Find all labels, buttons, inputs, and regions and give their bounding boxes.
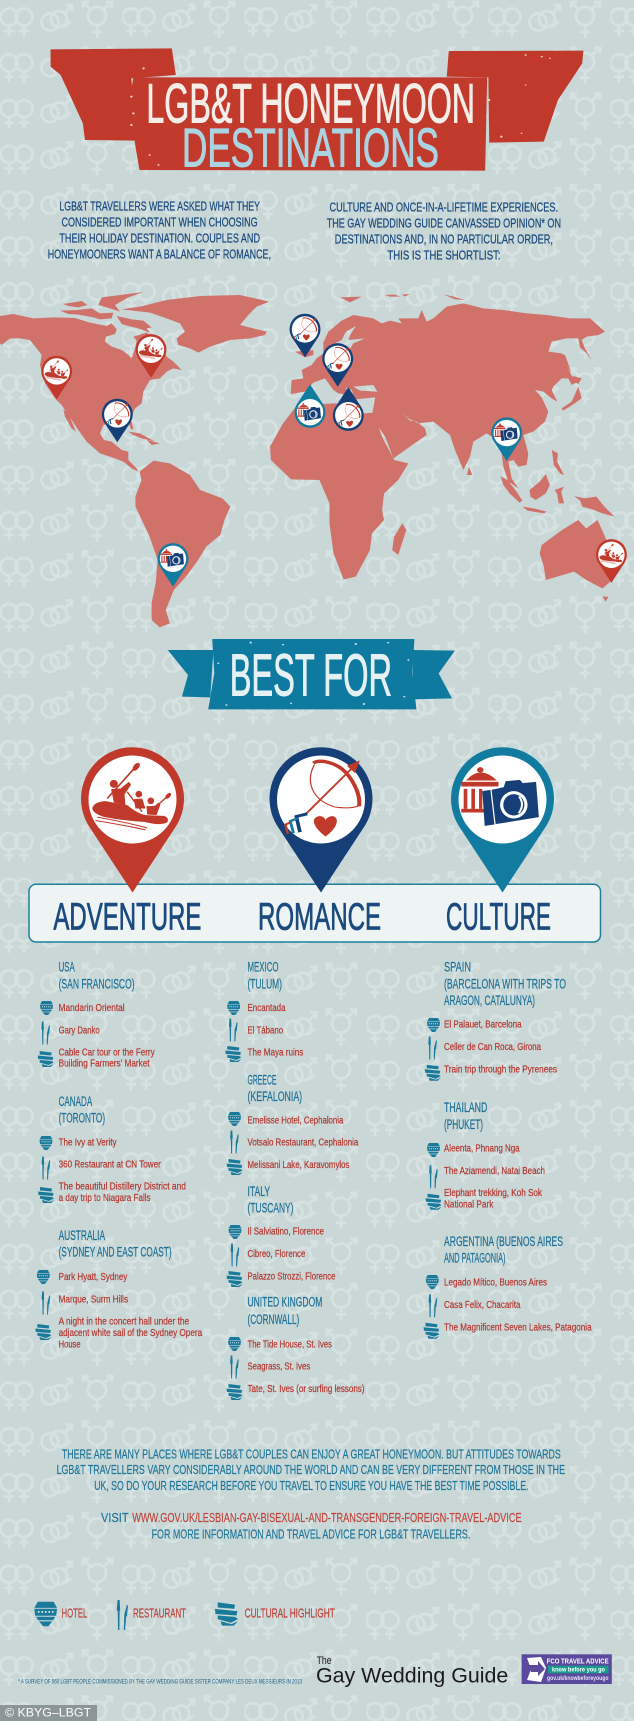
map pin: Sydney — [596, 539, 627, 583]
logo: the gay wedding guide: The — [317, 1655, 332, 1667]
visit link text: VISIT — [101, 1510, 129, 1525]
romance column: Italy: Palazzo Strozzi, Florence — [248, 1271, 336, 1282]
adventure column: Canada: a day trip to Niagara Falls — [59, 1193, 151, 1204]
legend: restaurant: RESTAURANT — [133, 1606, 186, 1620]
romance column: United Kingdom: Seagrass, St. Ives — [248, 1362, 310, 1373]
adventure column: Canada: The Ivy at Verity — [59, 1138, 117, 1149]
logo: FCO travel advice: gov.uk/knowbeforeyougo — [547, 1676, 609, 1682]
culture column: Thailand: Elephant trekking, Koh Sok — [444, 1188, 543, 1199]
footnote: * A SURVEY OF 560 LGBT PEOPLE COMMISSIONED BY THE GAY WEDDING GUIDE SISTER COMPANY LES DEUX MESSIEURS IN 2013 — [18, 1678, 302, 1685]
culture column: Thailand: The Aziamendi, Natai Beach — [444, 1166, 545, 1177]
culture column: Argentina: Casa Felix, Chacarita — [444, 1300, 521, 1311]
map pin: Barcelona — [295, 384, 325, 428]
romance column: United Kingdom: Tate, St. Ives (or surfing lessons) — [248, 1384, 364, 1395]
map pin: San Francisco — [41, 356, 72, 399]
culture column: Argentina: AND PATAGONIA) — [444, 1251, 506, 1266]
logo: FCO travel advice — [522, 1654, 612, 1684]
adventure column: Australia — [35, 1228, 202, 1350]
map pin: Tulum — [102, 399, 133, 442]
romance column: Greece: Emelisse Hotel, Cephalonia — [248, 1115, 344, 1126]
intro text: right column: THIS IS THE SHORTLIST: — [387, 248, 501, 262]
romance column: Italy: Il Salviatino, Florence — [248, 1227, 324, 1238]
copyright watermark: © KBYG–LBGT — [5, 1708, 91, 1720]
romance column: United Kingdom: (CORNWALL) — [248, 1312, 299, 1327]
intro text: right column — [327, 201, 561, 262]
visit link text: FOR MORE INFORMATION AND TRAVEL ADVICE FOR LGB&T TRAVELLERS. — [152, 1526, 470, 1541]
legend: hotel — [34, 1602, 87, 1626]
intro text: left column: CONSIDERED IMPORTANT WHEN CHOOSING — [62, 216, 258, 230]
adventure column: Canada: CANADA — [59, 1094, 92, 1109]
logo: FCO travel advice: FCO TRAVEL ADVICE — [547, 1656, 609, 1665]
adventure column: USA: Building Farmers' Market — [59, 1059, 150, 1070]
intro text: right column: DESTINATIONS AND, IN NO PARTICULAR ORDER, — [335, 233, 553, 247]
adventure column: USA — [38, 960, 155, 1070]
romance column: Italy: Cibreo, Florence — [248, 1249, 306, 1260]
adventure column: Canada: The beautiful Distillery District and — [59, 1181, 186, 1192]
map pin: Cornwall — [290, 314, 320, 357]
large pin: culture — [451, 747, 554, 892]
romance column: Greece — [226, 1072, 359, 1175]
romance column: Mexico: (TULUM) — [248, 976, 282, 991]
culture column: Thailand: Aleenta, Phnang Nga — [444, 1144, 520, 1155]
culture column: Spain: SPAIN — [444, 960, 471, 975]
romance column: Mexico: MEXICO — [248, 960, 278, 975]
best for ribbon: BEST FOR — [230, 643, 392, 709]
adventure column: USA: Gary Danko — [59, 1025, 100, 1036]
large pin: adventure — [81, 747, 184, 892]
romance column: Italy — [226, 1184, 336, 1287]
romance column: Mexico: The Maya ruins — [248, 1047, 303, 1058]
intro text: right column: CULTURE AND ONCE-IN-A-LIFETIME EXPERIENCES. — [330, 201, 558, 215]
label: romance: ROMANCE — [258, 896, 381, 938]
title banner — [51, 48, 583, 179]
adventure column: USA: Mandarin Oriental — [59, 1003, 125, 1014]
map pin: Kefalonia — [333, 387, 364, 431]
map pin: Phuket — [491, 417, 522, 461]
logo: the gay wedding guide — [316, 1655, 508, 1688]
world map — [0, 292, 627, 627]
culture column: Spain — [425, 960, 566, 1081]
culture column: Argentina — [424, 1234, 592, 1339]
culture column: Thailand: THAILAND — [444, 1100, 487, 1115]
adventure column: Australia: Marque, Surm Hills — [59, 1294, 128, 1305]
adventure column: Australia: adjacent white sail of the Sydney Opera — [59, 1328, 202, 1339]
romance column: Greece: (KEFALONIA) — [248, 1089, 302, 1104]
romance column: Italy: ITALY — [248, 1184, 270, 1199]
romance column: United Kingdom: The Tide House, St. Ives — [248, 1339, 332, 1350]
adventure column: Australia: AUSTRALIA — [59, 1228, 105, 1243]
culture column: Spain: Celler de Can Roca, Girona — [444, 1042, 541, 1053]
culture column: Thailand — [426, 1100, 545, 1210]
legend: restaurant — [117, 1600, 186, 1630]
romance column: Greece: GREECE — [248, 1072, 276, 1087]
legend: cultural highlight — [215, 1602, 335, 1626]
large pin: romance — [270, 747, 372, 892]
intro text: left column — [48, 200, 271, 261]
best for ribbon — [168, 639, 455, 709]
map pin: Tuscany — [322, 343, 353, 387]
label: adventure: ADVENTURE — [53, 896, 201, 938]
culture column: Spain: ARAGON, CATALUNYA) — [444, 993, 535, 1008]
culture column: Spain: El Palauet, Barcelona — [444, 1020, 522, 1031]
map pin: Toronto — [136, 334, 166, 378]
romance column: Mexico: El Tábano — [248, 1025, 283, 1036]
adventure column: Australia: (SYDNEY AND EAST COAST) — [59, 1245, 172, 1260]
intro text: left column: LGB&T TRAVELLERS WERE ASKED WHAT THEY — [59, 200, 260, 214]
visit link text — [101, 1510, 522, 1541]
adventure column: USA: (SAN FRANCISCO) — [59, 976, 135, 991]
category label bar — [29, 884, 600, 942]
romance column: United Kingdom — [226, 1295, 364, 1400]
adventure column: Canada — [38, 1094, 186, 1204]
culture column: Thailand: (PHUKET) — [444, 1117, 483, 1132]
copyright watermark — [0, 1705, 97, 1721]
romance column: Mexico — [225, 960, 303, 1062]
romance column: Mexico: Encantada — [248, 1003, 286, 1014]
logo: the gay wedding guide: Gay Wedding Guide — [316, 1665, 508, 1688]
culture column: Spain: (BARCELONA WITH TRIPS TO — [444, 976, 566, 991]
culture column: Argentina: ARGENTINA (BUENOS AIRES — [444, 1234, 563, 1249]
adventure column: Australia: Park Hyatt, Sydney — [59, 1272, 127, 1283]
culture column: Argentina: Legado Mítico, Buenos Aires — [444, 1278, 547, 1289]
closing advice text — [57, 1446, 565, 1493]
legend — [34, 1600, 335, 1630]
adventure column: Australia: A night in the concert hall under the — [59, 1317, 190, 1328]
intro text: left column: THEIR HOLIDAY DESTINATION. COUPLES AND — [59, 232, 260, 246]
intro text: left column: HONEYMOONERS WANT A BALANCE OF ROMANCE, — [48, 247, 271, 261]
culture column: Spain: Train trip through the Pyrenees — [444, 1064, 557, 1075]
adventure column: USA: Cable Car tour or the Ferry — [59, 1047, 155, 1058]
map pin: Buenos Aires — [158, 543, 188, 587]
adventure column: USA: USA — [59, 960, 75, 975]
adventure column: Canada: 360 Restaurant at CN Tower — [59, 1159, 161, 1170]
romance column: Italy: (TUSCANY) — [248, 1201, 294, 1216]
legend: cultural highlight: CULTURAL HIGHLIGHT — [245, 1606, 335, 1620]
adventure column: Canada: (TORONTO) — [59, 1111, 105, 1126]
culture column: Thailand: National Park — [444, 1199, 494, 1210]
romance column: Greece: Votsalo Restaurant, Cephalonia — [248, 1138, 359, 1149]
label: culture: CULTURE — [446, 896, 551, 938]
legend: hotel: HOTEL — [62, 1606, 87, 1621]
logo: FCO travel advice: know before you go — [552, 1666, 605, 1674]
title line 2: DESTINATIONS — [182, 117, 439, 179]
romance column: Greece: Melissani Lake, Karavomylos — [248, 1160, 350, 1171]
adventure column: Australia: House — [59, 1339, 81, 1350]
romance column: United Kingdom: UNITED KINGDOM — [248, 1295, 322, 1310]
culture column: Argentina: The Magnificent Seven Lakes, Patagonia — [444, 1322, 592, 1333]
